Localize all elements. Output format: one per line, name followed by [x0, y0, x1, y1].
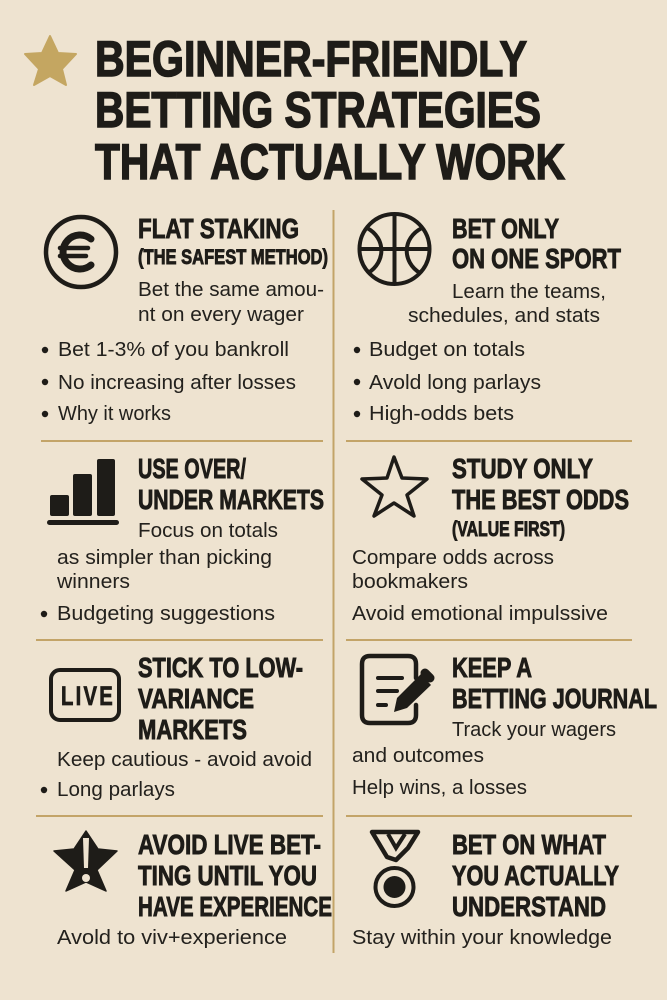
heading: avoid live betting [138, 829, 332, 922]
text: over/under description: winners [56, 571, 130, 593]
heading: low-variance: STICK TO LOW- [138, 652, 303, 683]
heading: what you understand [452, 829, 619, 922]
text: avoid live description: Avold to viv+experience [57, 927, 287, 949]
heading: what you understand: BET ON WHAT [452, 829, 606, 860]
list: flat staking bullets: Why it works [58, 403, 171, 425]
list: flat staking bullets: Bet 1-3% of you bankroll [58, 339, 289, 361]
text: best odds description: Avoid emotional impulssive [352, 603, 608, 625]
heading: over/under: UNDER MARKETS [138, 484, 324, 515]
icon: journal and pen [362, 656, 431, 723]
panel: one sport [354, 213, 621, 425]
heading: one sport: ON ONE SPORT [452, 243, 621, 274]
text: best odds description: Compare odds across [352, 547, 554, 569]
panel: over/under markets [41, 453, 324, 625]
text: understand description: Stay within your knowledge [352, 927, 612, 949]
icon: live badge [51, 670, 119, 720]
panel: avoid live betting [54, 829, 332, 949]
text: over/under description: as simpler than picking [57, 547, 272, 569]
heading: best odds [452, 453, 629, 541]
text: journal description: and outcomes [352, 745, 484, 767]
icon: star with exclamation [54, 831, 117, 891]
text: over/under description: Focus on totals [138, 520, 278, 542]
heading: avoid live betting: HAVE EXPERIENCE [138, 891, 332, 922]
list: over/under bullet: Budgeting suggestions [57, 603, 275, 625]
heading: best odds: (VALUE FIRST) [452, 518, 565, 541]
icon: medal [372, 832, 418, 906]
icon: euro coin [46, 217, 116, 287]
text: best odds description [352, 547, 608, 625]
heading: avoid live betting: AVOID LIVE BET- [138, 829, 321, 860]
text: over/under description [56, 520, 278, 593]
icon: star outline [362, 457, 427, 516]
text: flat staking description [138, 279, 324, 326]
list: one sport bullets [354, 339, 541, 425]
icon: bar chart [47, 459, 119, 525]
heading: over/under [138, 453, 324, 515]
list: low-variance bullet: Long parlays [57, 779, 175, 801]
panel: betting journal [352, 652, 657, 799]
text: flat staking description: Bet the same amou- [138, 279, 324, 301]
text: low-variance description: Keep cautious - avoid avoid [57, 749, 312, 771]
panel: flat staking [42, 213, 328, 425]
text: one sport description: schedules, and stats [408, 305, 600, 327]
list: flat staking bullets: No increasing after losses [58, 372, 296, 394]
panel: best odds [352, 453, 629, 625]
text: flat staking description: nt on every wager [138, 304, 304, 326]
list: flat staking bullets [42, 339, 296, 425]
panel: what you understand [352, 829, 619, 949]
heading: over/under: USE OVER/ [138, 453, 246, 484]
text: best odds description: bookmakers [352, 571, 468, 593]
heading: what you understand: YOU ACTUALLY [452, 860, 619, 891]
icon: gold star [25, 36, 76, 85]
heading: betting journal [452, 652, 657, 714]
heading: what you understand: UNDERSTAND [452, 891, 606, 922]
title: BEGINNER-FRIENDLY [95, 31, 527, 87]
heading: best odds: STUDY ONLY [452, 453, 593, 484]
heading: one sport: BET ONLY [452, 213, 559, 244]
heading: one sport [452, 213, 621, 274]
heading: flat staking: FLAT STAKING [138, 213, 299, 244]
heading: flat staking [138, 213, 328, 269]
icon: basketball [360, 214, 430, 284]
heading: low-variance: VARIANCE [138, 683, 254, 714]
heading: avoid live betting: TING UNTIL YOU [138, 860, 317, 891]
heading: flat staking: (THE SAFEST METHOD) [138, 246, 328, 269]
title [95, 31, 565, 190]
text: journal description: Track your wagers [452, 719, 616, 741]
list: one sport bullets: Avold long parlays [369, 372, 541, 394]
heading: low-variance: MARKETS [138, 714, 247, 745]
list: one sport bullets: High-odds bets [369, 403, 514, 425]
text: journal description [352, 719, 616, 799]
heading: betting journal: KEEP A [452, 652, 532, 683]
list: one sport bullets: Budget on totals [369, 339, 525, 361]
text: one sport description: Learn the teams, [452, 281, 606, 303]
text: one sport description [408, 281, 606, 327]
text: journal description: Help wins, a losses [352, 777, 527, 799]
title: THAT ACTUALLY WORK [95, 134, 565, 190]
panel: low-variance markets [41, 652, 312, 801]
heading: low-variance [138, 652, 303, 745]
title: BETTING STRATEGIES [95, 82, 541, 138]
icon: live badge: LIVE [61, 681, 115, 712]
